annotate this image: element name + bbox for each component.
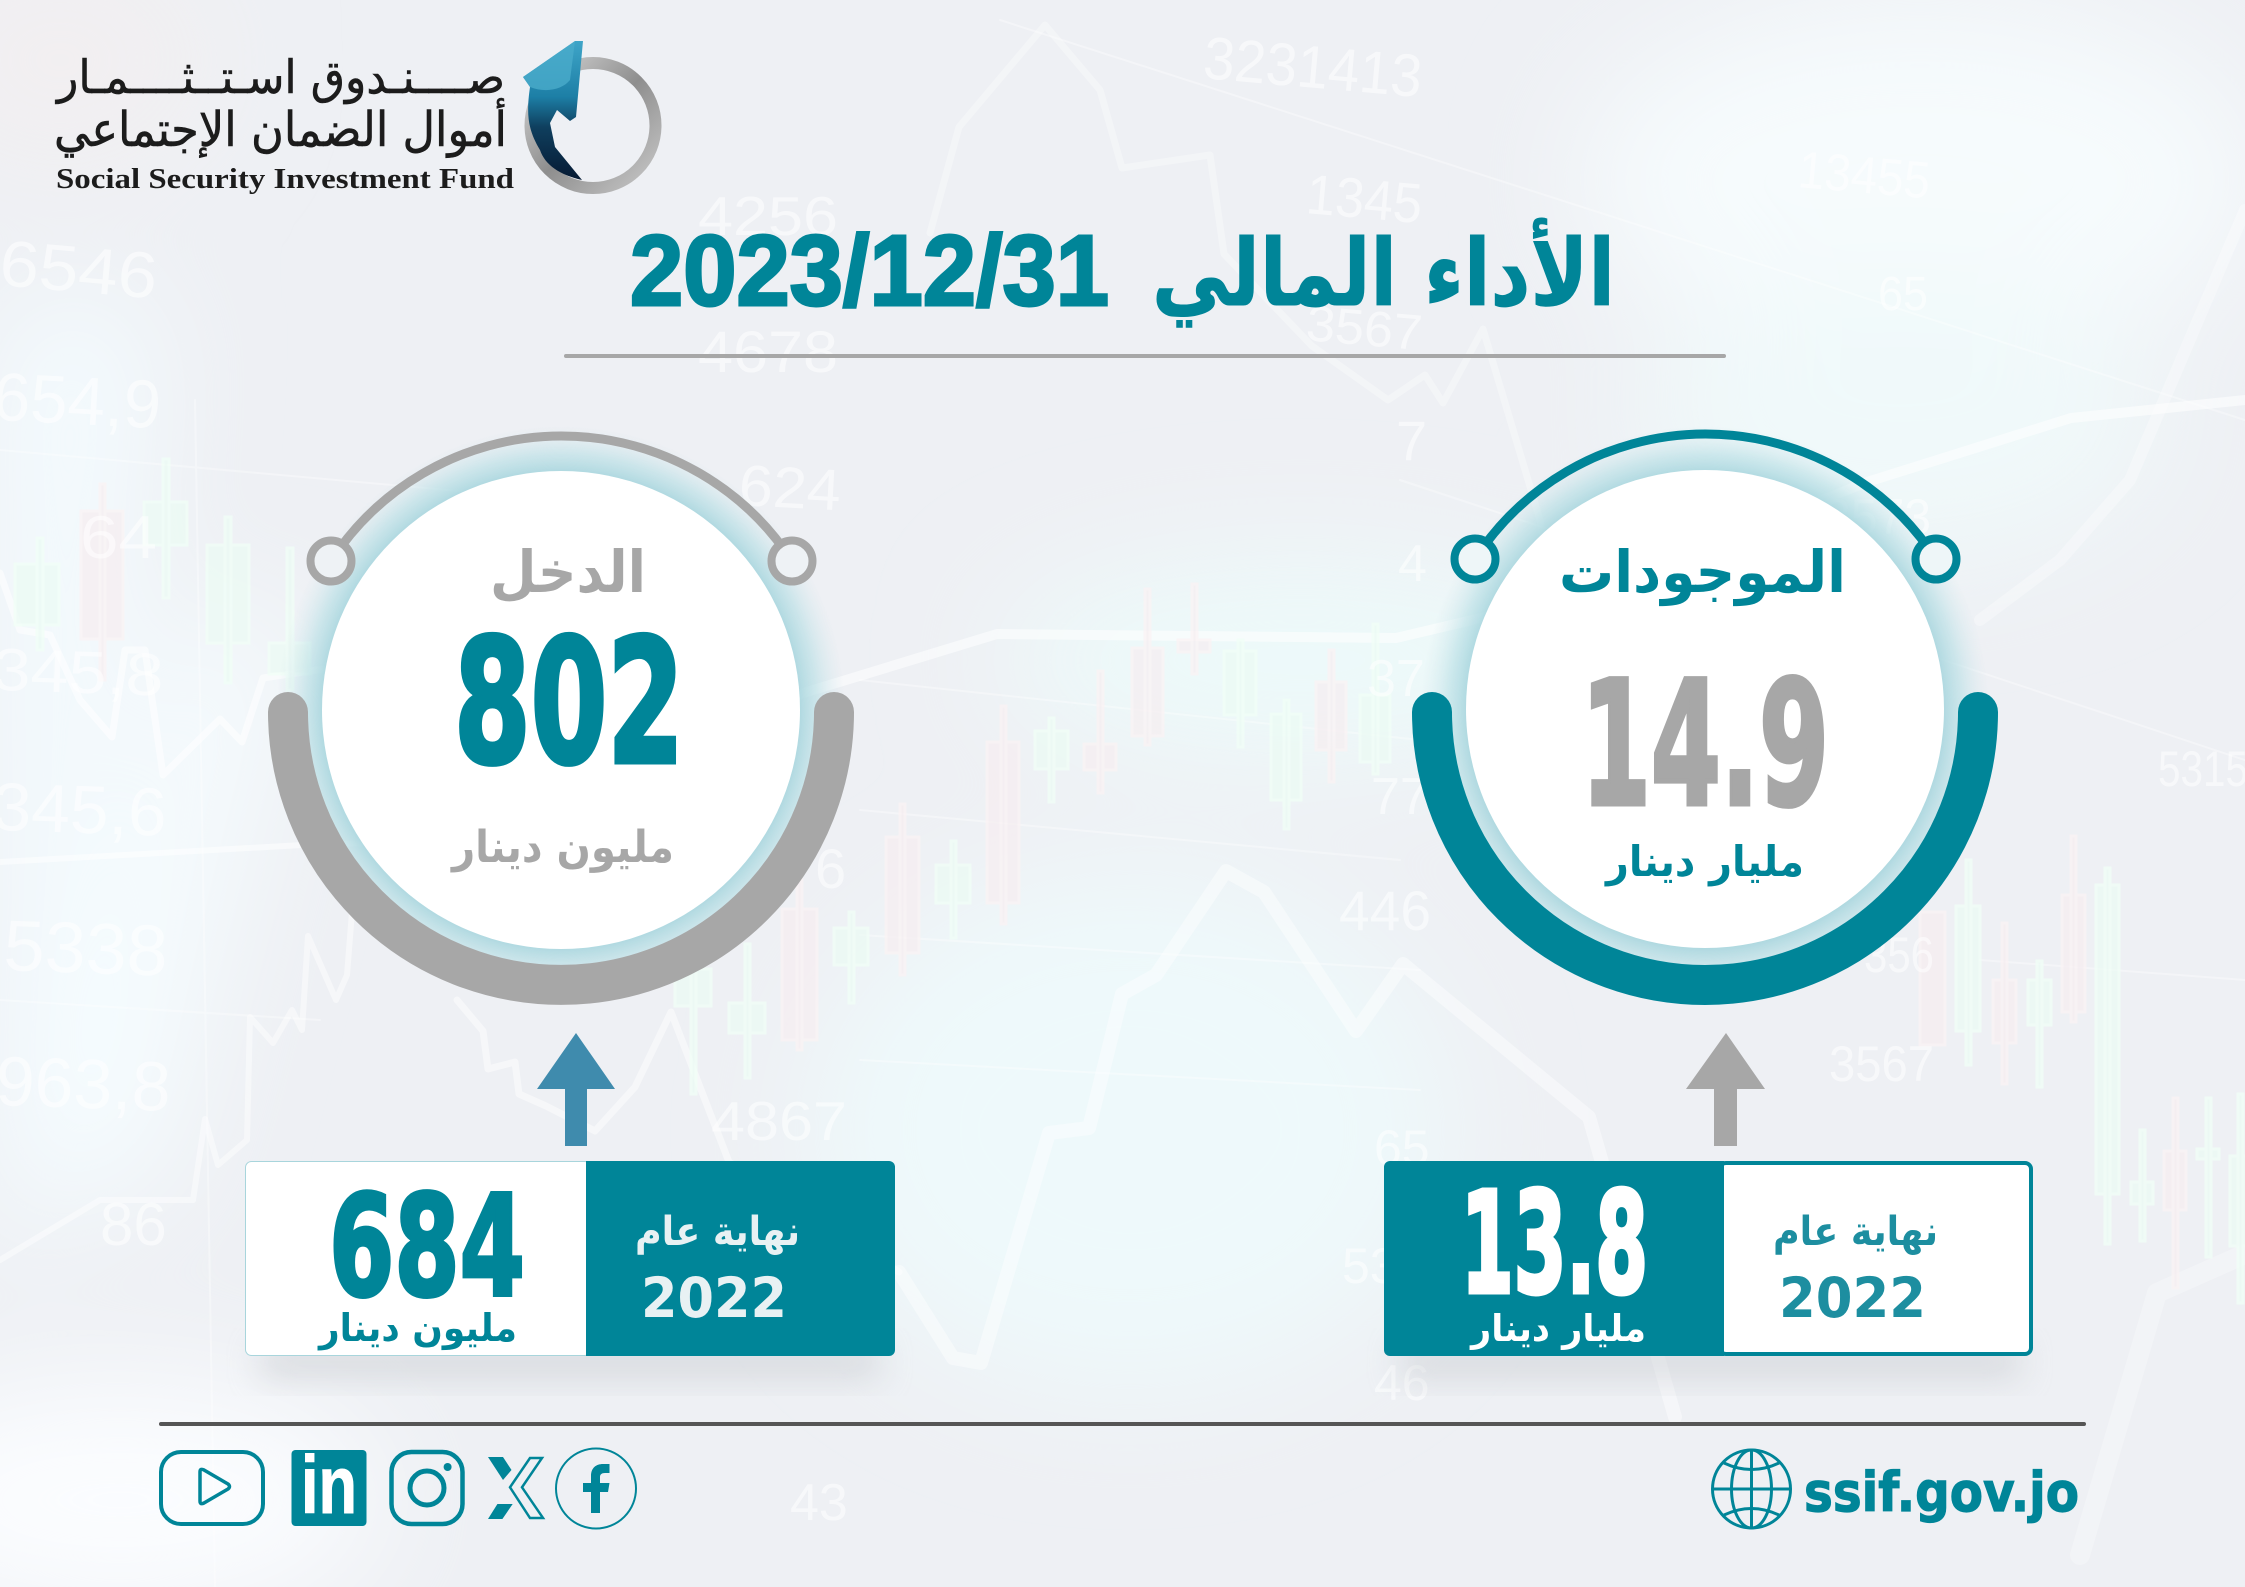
- faint background numbers: 37: [1367, 650, 1425, 708]
- value: 684: [329, 1166, 525, 1329]
- value: 13.8: [1461, 1163, 1648, 1326]
- white disc: [322, 471, 800, 949]
- left end dot: [1454, 538, 1496, 580]
- logo Arabic name: [54, 50, 507, 158]
- footer divider: [159, 1422, 2086, 1426]
- url: ssif.gov.jo: [1804, 1461, 2079, 1524]
- faint background numbers: 6546: [0, 226, 161, 313]
- year label: نهاية عام: [635, 1209, 800, 1255]
- icon: Instagram: [392, 1452, 462, 1524]
- faint background numbers: 446: [1339, 879, 1431, 942]
- faint background numbers: 356: [1864, 927, 1934, 983]
- faint background numbers: 6: [815, 837, 846, 900]
- year label: نهاية عام: [1773, 1209, 1938, 1255]
- halo ring: [277, 426, 845, 994]
- left end dot: [310, 540, 352, 582]
- faint background numbers: 65: [1878, 268, 1928, 321]
- comparison box: assets 2022: [1384, 1161, 2031, 1356]
- logo Arabic name: صــــنـدوق اسـتــثــــمـار: [55, 50, 505, 105]
- faint background numbers: 13455: [1796, 141, 1933, 210]
- faint background numbers: 4256: [698, 185, 838, 247]
- website link: [1712, 1450, 2079, 1528]
- faint background numbers: 86: [100, 1191, 167, 1258]
- faint background numbers: 1345: [1304, 162, 1425, 235]
- faint background numbers: 3567: [1829, 1036, 1934, 1092]
- unit: مليون دينار: [317, 1306, 517, 1350]
- thin upper arc: [331, 436, 792, 561]
- faint background numbers: 3573: [1824, 489, 1931, 545]
- faint background numbers: 77: [1371, 768, 1429, 826]
- icon: YouTube: [161, 1452, 263, 1524]
- halo ring: [1421, 426, 1989, 994]
- thick lower arc: [288, 712, 834, 985]
- candlesticks: [15, 459, 2245, 1303]
- faint background numbers: 7: [1396, 409, 1427, 472]
- year: 2022: [641, 1266, 787, 1330]
- faint background numbers: 65: [1374, 1120, 1430, 1176]
- faint background numbers: 46: [1374, 1355, 1430, 1411]
- faint background numbers: 4867: [711, 1090, 847, 1152]
- faint background numbers: 43: [790, 1474, 848, 1532]
- unit: مليار دينار: [1604, 837, 1804, 886]
- faint background numbers: 624: [737, 453, 843, 523]
- logo Arabic name: أموال الضمان الإجتماعي: [54, 98, 507, 158]
- arrow: assets up: [1686, 1033, 1765, 1146]
- box shadows: [260, 1345, 2020, 1379]
- social icons: [161, 1440, 636, 1531]
- title: financial performance date: [630, 215, 1615, 327]
- thick lower arc: [1432, 712, 1978, 985]
- value: 802: [454, 602, 684, 803]
- right end dot: [772, 540, 812, 582]
- year: 2022: [1779, 1266, 1926, 1330]
- right end dot: [1916, 538, 1956, 580]
- gauge: assets (الموجودات): [1421, 426, 1989, 994]
- comparison box: income 2022: [246, 1161, 895, 1356]
- title: financial performance date: الأداء المالي: [1152, 218, 1615, 327]
- unit: مليون دينار: [450, 822, 674, 873]
- unit: مليار دينار: [1469, 1307, 1646, 1350]
- label: الدخل: [490, 538, 646, 606]
- value: 14.9: [1581, 644, 1829, 845]
- icon: X: [488, 1457, 543, 1519]
- logo English name: Social Security Investment Fund: [56, 164, 514, 195]
- icon: LinkedIn: in: [301, 1440, 357, 1531]
- white disc: [1466, 470, 1944, 948]
- icon: globe: [1712, 1450, 1790, 1528]
- arrow: income up: [537, 1033, 615, 1146]
- thin upper arc: [1475, 434, 1936, 559]
- label: الموجودات: [1559, 538, 1846, 607]
- value panel: [1384, 1161, 1724, 1356]
- faint background numbers: 4678: [698, 320, 838, 385]
- gauge: income (الدخل): [277, 426, 845, 994]
- title: financial performance date: 2023/12/31: [630, 215, 1109, 327]
- year panel: [1720, 1163, 2031, 1354]
- faint background numbers: 3231413: [1201, 24, 1425, 110]
- faint background numbers: 53: [1342, 1238, 1398, 1294]
- logo: Social Security Investment Fund: [54, 41, 656, 195]
- value panel: [246, 1162, 590, 1356]
- faint background numbers: 4: [1398, 535, 1427, 593]
- year panel: [586, 1161, 895, 1356]
- faint background numbers: 5338: [2, 906, 169, 992]
- logo mark: ring and arrow: [523, 41, 656, 188]
- faint background numbers: 3567: [1304, 295, 1424, 361]
- title underline: [564, 354, 1726, 358]
- faint background numbers: 64: [80, 504, 157, 571]
- icon: Facebook: [556, 1448, 636, 1528]
